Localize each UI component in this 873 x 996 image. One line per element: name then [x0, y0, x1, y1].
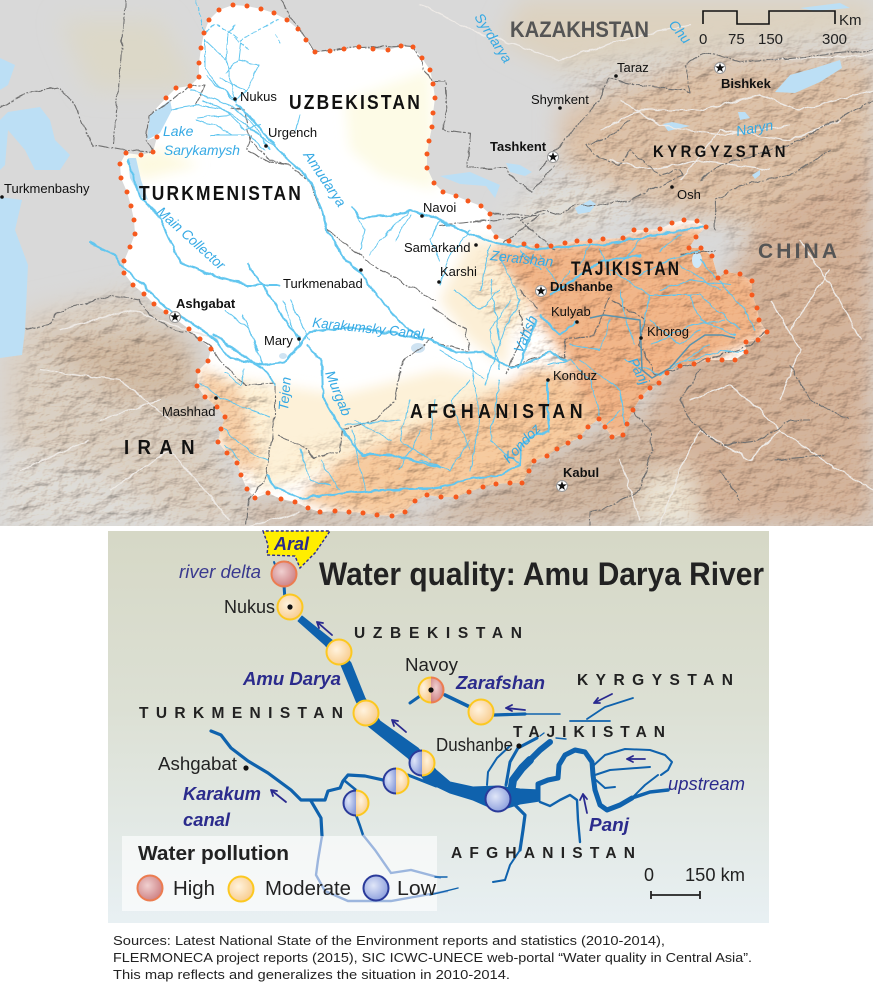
schematic place labels: Navoy	[405, 655, 458, 675]
flow arrow	[392, 720, 406, 732]
rivers	[90, 0, 755, 498]
flow arrow	[627, 756, 645, 762]
flow arrow	[580, 794, 587, 813]
marker: moderate	[326, 640, 352, 664]
country labels	[124, 17, 837, 459]
marker: low and moderate	[384, 768, 408, 794]
river and lake labels: Kondoz	[499, 420, 544, 466]
pollution markers on the river	[272, 562, 510, 816]
river and lake labels: Murgab	[322, 368, 355, 418]
Aral sea marker: Aral	[273, 534, 310, 554]
marker: low and moderate	[410, 750, 434, 776]
schematic place labels	[139, 562, 745, 862]
marker: Zarafshan, moderate	[468, 700, 494, 724]
sources text block: This map reflects and generalizes the situation in 2010-2014.	[113, 967, 510, 982]
country labels: KYRGYZSTAN	[653, 142, 789, 161]
legend: moderate	[228, 876, 351, 902]
legend: high	[138, 876, 215, 900]
marker: Nukus, moderate	[278, 594, 302, 620]
river and lake labels: Syrdarya	[471, 10, 516, 66]
marker: low and moderate	[344, 790, 368, 816]
schematic place labels: Panj	[589, 815, 630, 835]
marker: river delta, high	[272, 562, 296, 586]
map scale bar: 0	[699, 31, 707, 48]
schematic place labels: UZBEKISTAN	[354, 625, 522, 642]
legend: high: High	[173, 878, 215, 900]
country borders	[0, 0, 873, 526]
schematic place labels: KYRGYSTAN	[577, 672, 733, 689]
schematic scale bar: 150 km	[685, 865, 745, 885]
river and lake labels: Amudarya	[300, 147, 350, 210]
marker: low	[486, 786, 510, 812]
marker: Navoy, moderate and high	[418, 678, 444, 702]
Aral sea marker	[263, 531, 330, 568]
river and lake labels: Sarykamysh	[164, 142, 240, 158]
schematic place labels: TURKMENISTAN	[139, 705, 343, 722]
panel background	[108, 531, 769, 923]
city labels and markers: Nukus	[240, 89, 277, 104]
country labels: UZBEKISTAN	[289, 92, 422, 114]
river and lake labels: Panj	[625, 355, 653, 388]
city labels and markers: Mary	[264, 333, 293, 348]
schematic place labels: river delta	[179, 562, 261, 582]
capital cities with star icons: Bishkek	[721, 76, 772, 91]
river and lake labels: Chu	[666, 17, 695, 47]
city labels and markers: Taraz	[617, 60, 649, 75]
map scale bar	[699, 11, 862, 48]
basin boundary dots	[118, 2, 770, 518]
river and lake labels: Tejen	[275, 376, 294, 411]
city labels and markers: Kulyab	[551, 304, 591, 319]
schematic place labels: Karakum	[183, 784, 261, 804]
country labels: CHINA	[758, 240, 837, 263]
basin area	[120, 5, 766, 516]
legend: moderate: Moderate	[265, 878, 351, 900]
Panj river on the border	[590, 315, 735, 378]
flow arrow	[271, 790, 286, 802]
river and lake labels: Lake	[163, 123, 194, 139]
schematic place labels: canal	[183, 810, 231, 830]
city labels and markers: Samarkand	[404, 240, 470, 255]
white relief streams	[20, 4, 873, 526]
city labels and markers: Osh	[677, 187, 701, 202]
flow arrow	[506, 705, 525, 711]
capital cities with star icons: Dushanbe	[550, 279, 613, 294]
schematic place labels: Nukus	[224, 597, 275, 617]
legend panel: Water pollution	[138, 843, 289, 865]
map scale bar: 300	[822, 31, 847, 48]
city labels and markers: Urgench	[268, 125, 317, 140]
legend panel	[122, 835, 458, 911]
city labels and markers: Khorog	[647, 324, 689, 339]
map background terrain	[0, 0, 873, 526]
capital cities with star icons: Tashkent	[490, 139, 547, 154]
title: Water quality: Amu Darya River	[319, 556, 764, 592]
water bodies outside the basin	[0, 3, 850, 358]
country labels: KAZAKHSTAN	[510, 17, 649, 42]
schematic place labels: Ashgabat	[158, 754, 237, 774]
map scale bar: Km	[839, 12, 862, 29]
flow arrow	[594, 694, 612, 703]
sources text block	[113, 933, 752, 982]
legend: low: Low	[397, 878, 437, 900]
city labels and markers	[0, 60, 701, 419]
flow arrow	[317, 622, 332, 635]
sources text block: FLERMONECA project reports (2015), SIC ICWC-UNECE web-portal “Water quality in Central Asia”.	[113, 950, 752, 965]
city labels and markers: Turkmenabad	[283, 276, 363, 291]
country labels: TAJIKISTAN	[571, 259, 681, 280]
schematic scale bar: 0	[644, 865, 654, 885]
country labels: TURKMENISTAN	[139, 183, 303, 205]
capital cities with star icons: Kabul	[563, 465, 599, 480]
legend: low	[364, 876, 437, 900]
capital cities with star icons	[170, 62, 772, 492]
sources text block: Sources: Latest National State of the Environment reports and statistics (2010-2014),	[113, 933, 665, 948]
city labels and markers: Navoi	[423, 200, 456, 215]
capital cities with star icons: Ashgabat	[176, 296, 236, 311]
schematic place labels: TAJIKISTAN	[513, 724, 665, 741]
river and lake labels: Karakumsky Canal	[312, 314, 426, 342]
schematic place labels: Amu Darya	[242, 669, 341, 689]
country labels: AFGHANISTAN	[410, 401, 587, 423]
schematic scale bar	[644, 865, 745, 899]
schematic place labels: Zarafshan	[455, 673, 545, 693]
schematic place labels: AFGHANISTAN	[451, 845, 635, 862]
city labels and markers: Karshi	[440, 264, 477, 279]
map scale bar: 75	[728, 31, 745, 48]
panel: Amu Darya water quality schematic	[108, 531, 769, 923]
river and lake labels	[154, 10, 775, 466]
river and lake labels: Zerafshan	[489, 247, 554, 270]
city labels and markers: Shymkent	[531, 92, 589, 107]
river network	[211, 562, 672, 882]
river and lake labels: Vahsh	[510, 313, 540, 355]
river and lake labels: Main Collector	[154, 203, 230, 274]
river and lake labels: Naryn	[735, 117, 775, 139]
panel: relief map of the Amu Darya basin	[0, 0, 873, 526]
marker: moderate	[354, 700, 378, 726]
map scale bar: 150	[758, 31, 783, 48]
schematic place labels: upstream	[668, 774, 745, 794]
city labels and markers: Mashhad	[162, 404, 215, 419]
city labels and markers: Turkmenbashy	[4, 181, 90, 196]
city labels and markers: Konduz	[553, 368, 597, 383]
country labels: IRAN	[124, 437, 203, 459]
schematic place labels: Dushanbe	[436, 735, 513, 755]
